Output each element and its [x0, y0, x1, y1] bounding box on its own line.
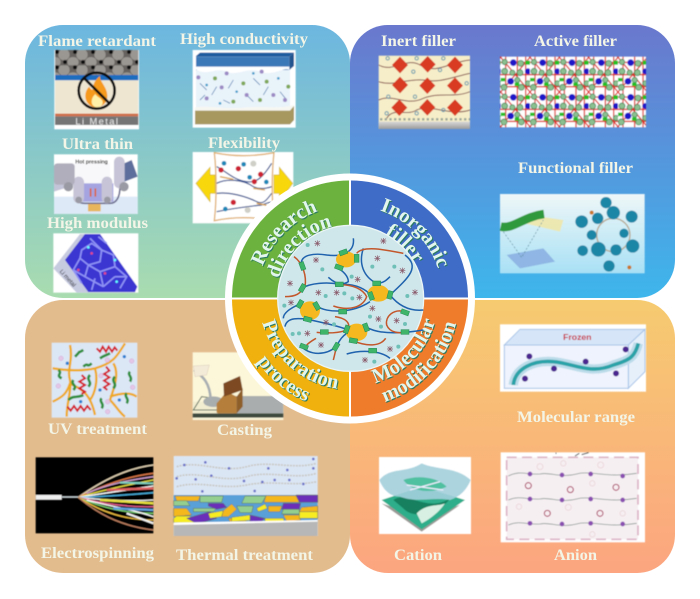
heading: Anion: Anion — [554, 547, 597, 564]
image: ultra thin hot pressing — [54, 154, 138, 214]
segment: research direction — [232, 180, 349, 298]
heading: Electrospinning: Electrospinning — [41, 545, 154, 562]
heading: UV treatment: UV treatment — [48, 421, 148, 438]
heading: Casting: Casting — [217, 422, 272, 439]
panel: molecular modification — [350, 300, 675, 573]
heading: High modulus: High modulus — [47, 215, 148, 232]
segment: preparation process: Preparation — [262, 318, 338, 390]
image: high conductivity electrolyte — [193, 50, 296, 128]
image: ultra thin hot pressing: Hot pressing — [75, 160, 108, 166]
panel: research direction — [25, 25, 350, 298]
image: active filler crystal — [500, 57, 646, 127]
segment: preparation process: process — [254, 356, 310, 402]
heading: Ultra thin: Ultra thin — [62, 136, 133, 153]
image: functional filler — [500, 194, 645, 273]
image: frozen molecular range — [500, 324, 646, 392]
segment: molecular modification: modification — [382, 322, 458, 403]
image: anion polymer — [501, 452, 645, 542]
segment: inorganic filler: Inorganic — [380, 198, 448, 269]
heading: Flexibility: Flexibility — [208, 135, 280, 152]
segment: research direction: Research — [250, 200, 318, 267]
image: inert filler particles — [379, 56, 470, 129]
segment: inorganic filler: filler — [386, 224, 424, 261]
image: thermal treatment layers — [174, 456, 318, 536]
image: flame retardant layers — [54, 50, 139, 129]
heading: High conductivity: High conductivity — [180, 31, 308, 48]
heading: Cation: Cation — [394, 547, 442, 564]
image: cation surface — [379, 457, 471, 534]
polymer network centre — [278, 225, 424, 371]
panel: preparation process — [25, 300, 350, 573]
image: flexibility stretched polymer — [193, 152, 293, 223]
segment: inorganic filler — [351, 180, 468, 298]
image: high modulus surface — [53, 233, 138, 293]
image: high modulus surface: Li metal — [58, 269, 76, 289]
image: electrospinning jet — [36, 457, 153, 533]
image: frozen molecular range: Frozen — [563, 332, 592, 342]
heading: Thermal treatment: Thermal treatment — [176, 547, 314, 564]
heading: Flame retardant: Flame retardant — [38, 33, 157, 50]
heading: Inert filler: Inert filler — [381, 33, 456, 50]
heading: Active filler: Active filler — [534, 33, 617, 50]
segment: molecular modification — [351, 300, 468, 416]
heading: Functional filler: Functional filler — [518, 160, 633, 177]
segment: molecular modification: Molecular — [370, 318, 436, 384]
image: casting doctor blade — [193, 352, 283, 420]
panel: inorganic filler — [350, 25, 675, 298]
image: UV treatment network — [52, 343, 137, 418]
heading: Molecular range: Molecular range — [517, 409, 635, 426]
image: flame retardant layers: Li Metal — [75, 116, 118, 126]
segment: research direction: direction — [267, 218, 333, 278]
segment: preparation process — [232, 300, 349, 416]
central wheel — [225, 174, 475, 424]
